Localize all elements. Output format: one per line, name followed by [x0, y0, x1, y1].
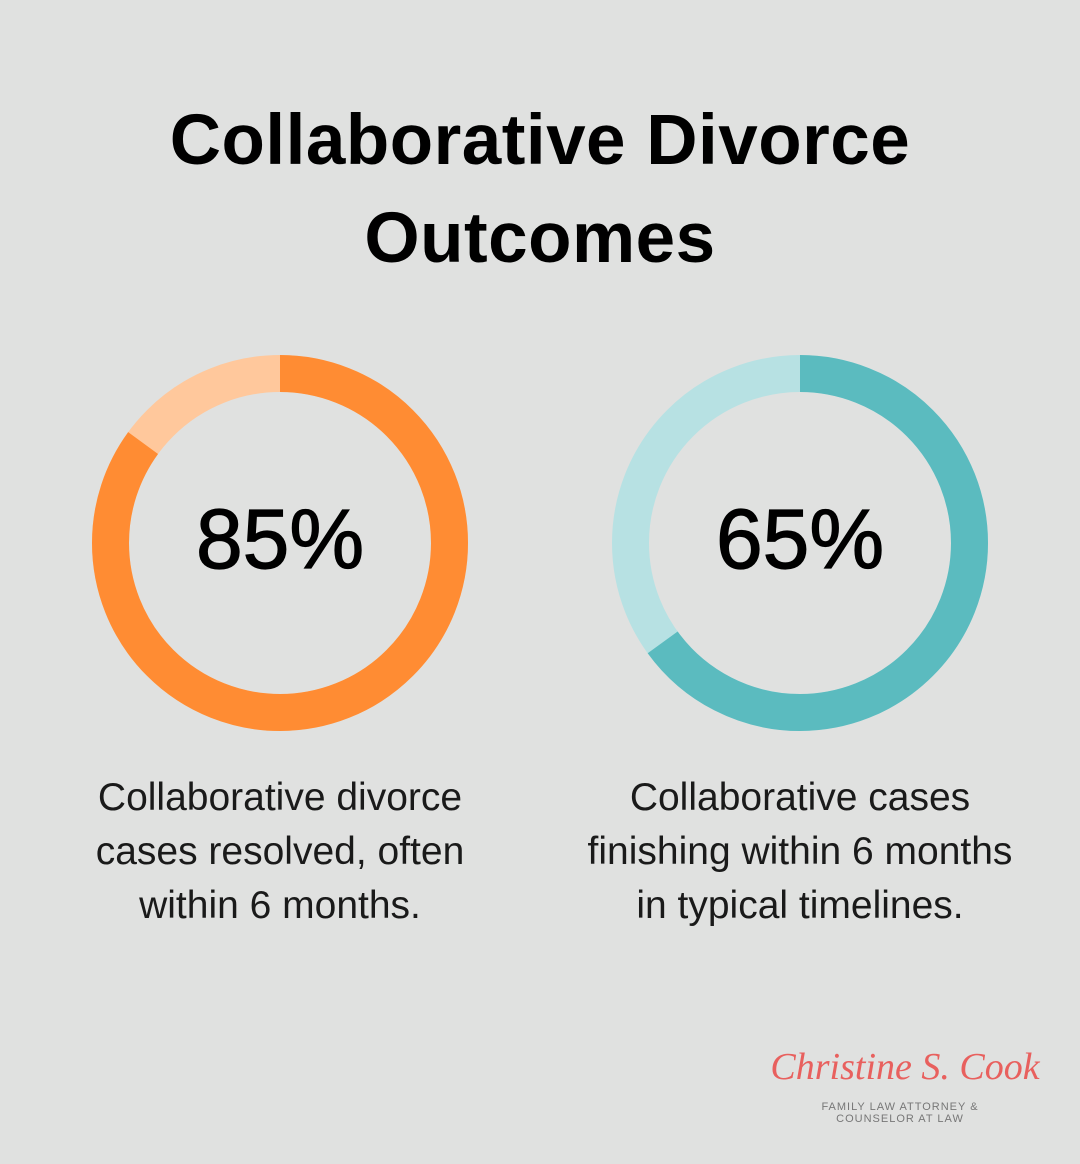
- donut: 85%: 85%: [196, 492, 364, 586]
- logo: Christine S. Cook: [770, 1046, 1040, 1088]
- caption: 85%: Collaborative divorce: [98, 776, 462, 819]
- logo: FAMILY LAW ATTORNEY &: [821, 1101, 979, 1113]
- title: Outcomes: [364, 199, 716, 278]
- donut: 65%: [630, 374, 970, 712]
- caption: 65%: finishing within 6 months: [588, 830, 1012, 873]
- caption: 85%: [96, 776, 464, 927]
- caption: 85%: within 6 months.: [139, 884, 421, 927]
- donut: 85%: [110, 374, 450, 712]
- caption: 65%: Collaborative cases: [630, 776, 970, 819]
- caption: 85%: cases resolved, often: [96, 830, 464, 873]
- caption: 65%: [588, 776, 1012, 927]
- donut: 65%: 65%: [716, 492, 884, 586]
- logo: [770, 1046, 1040, 1125]
- title: Collaborative Divorce: [170, 101, 910, 180]
- title: [170, 101, 910, 278]
- caption: 65%: in typical timelines.: [636, 884, 964, 927]
- logo: COUNSELOR AT LAW: [836, 1113, 964, 1125]
